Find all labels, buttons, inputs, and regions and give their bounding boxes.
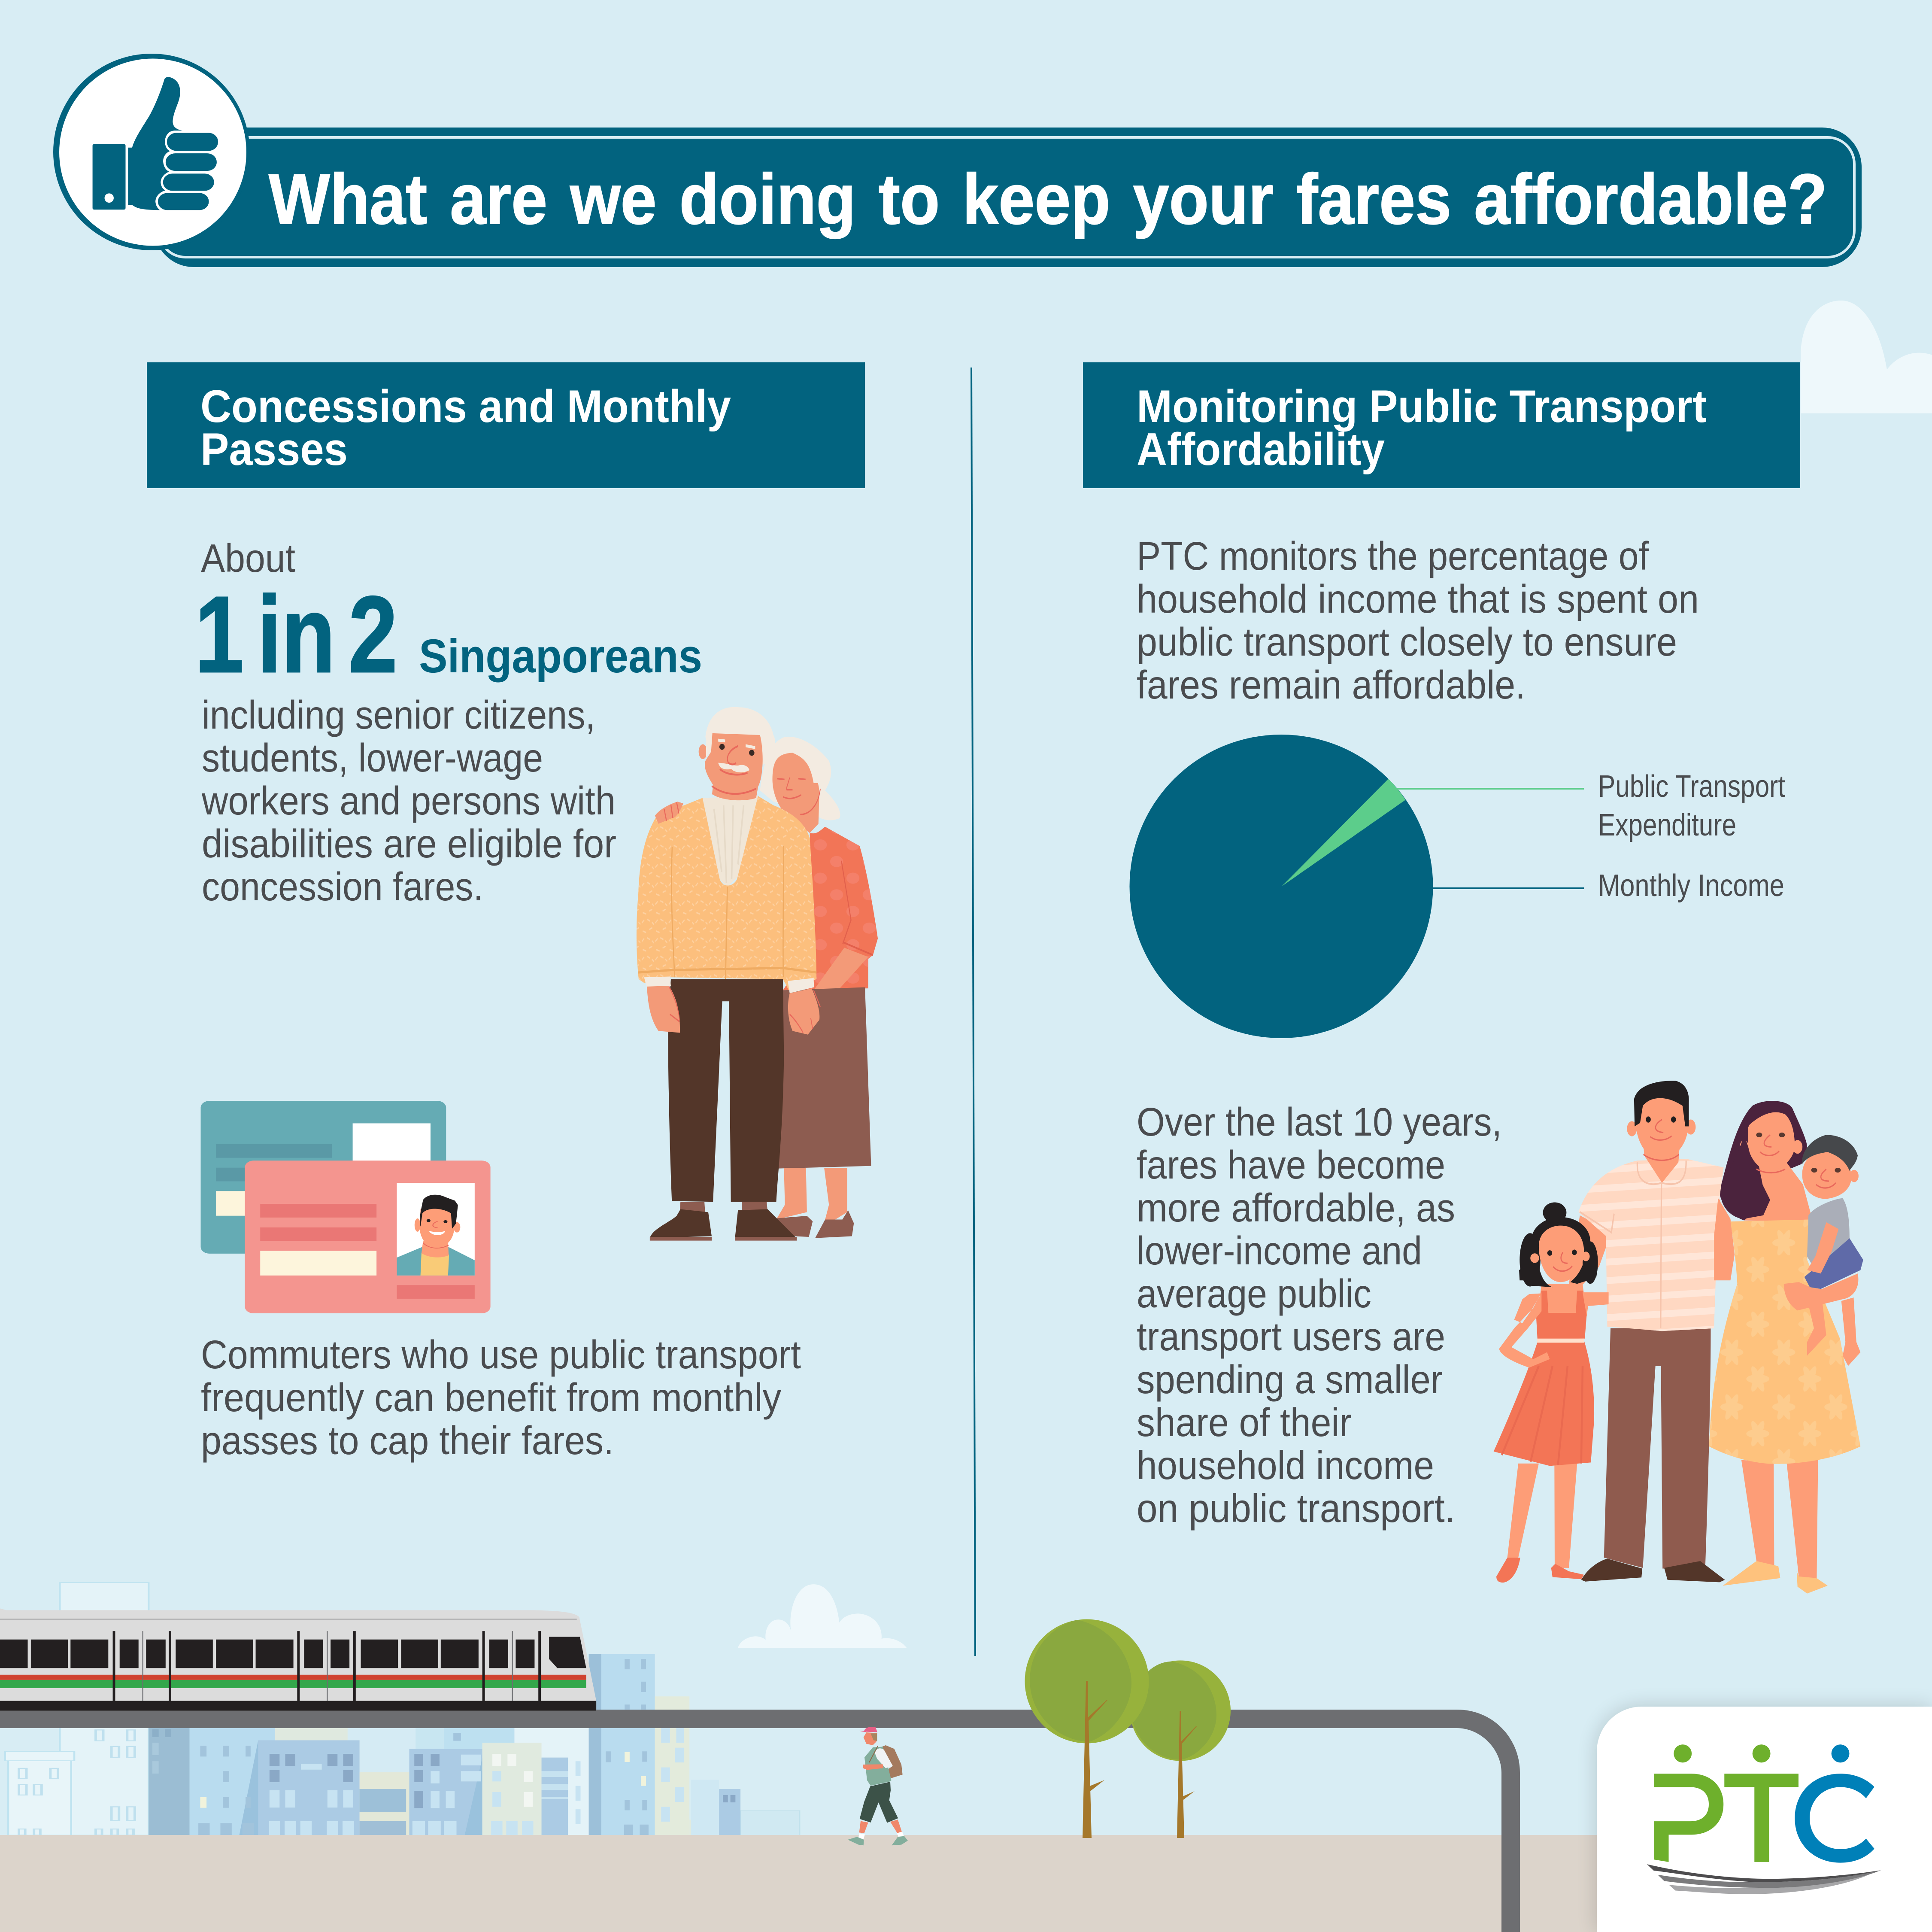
text: fares more affordable: more affordable, as — [1137, 1185, 1455, 1230]
illustration: family — [1494, 1081, 1863, 1594]
text: concession eligibility: concession fares. — [202, 864, 483, 909]
text: PTC monitoring: household income that is spent on — [1137, 577, 1699, 621]
girl — [1494, 1202, 1609, 1583]
father — [1569, 1081, 1733, 1582]
title banner — [154, 128, 1862, 267]
ground — [0, 1835, 1932, 1932]
train windows — [0, 1637, 586, 1668]
legend: income: Monthly Income — [1598, 869, 1784, 903]
big stat: 1 in 2: 1 in 2 — [195, 574, 397, 695]
text: PTC monitoring — [1137, 534, 1699, 707]
panel heading: monitoring — [1083, 362, 1800, 488]
text: fares more affordable: spending a smaller — [1137, 1357, 1443, 1402]
text: concession eligibility: workers and persons with — [201, 778, 616, 823]
legend: expenditure: Public Transport — [1598, 769, 1785, 804]
undercarriage — [0, 1701, 596, 1711]
text: concession eligibility — [201, 693, 616, 909]
text: concession eligibility: disabilities are eligible for — [202, 821, 616, 866]
text: fares more affordable: transport users are — [1137, 1314, 1445, 1359]
woman — [760, 737, 878, 1238]
text: PTC monitoring: PTC monitors the percentage of — [1137, 534, 1649, 578]
stat label: Singaporeans — [419, 630, 702, 683]
pie: public transport expenditure — [1282, 779, 1405, 886]
illustration: elderly couple — [637, 707, 878, 1241]
text: monthly passes: Commuters who use public transport — [201, 1332, 801, 1377]
train — [0, 1608, 596, 1711]
teal card — [201, 1101, 446, 1254]
text: monthly passes — [201, 1332, 801, 1463]
logo panel — [1597, 1707, 1932, 1932]
cloud: near train — [738, 1584, 907, 1648]
text: fares more affordable — [1137, 1100, 1502, 1531]
tree: large — [1025, 1619, 1149, 1838]
text: monthly passes: passes to cap their fares. — [201, 1418, 614, 1463]
text: PTC monitoring: fares remain affordable. — [1137, 662, 1526, 707]
elevated track viaduct — [0, 1710, 1520, 1932]
text: about: About — [201, 536, 295, 580]
icon: concession cards — [201, 1101, 491, 1313]
cloud: top right — [1801, 301, 1932, 413]
train body — [0, 1608, 596, 1711]
text: fares more affordable: share of their — [1137, 1400, 1352, 1445]
logo: PTC — [1647, 1744, 1881, 1894]
cityscape — [5, 1583, 800, 1835]
panel heading: monitoring: Affordability — [1137, 423, 1385, 475]
woman's hair back — [1720, 1101, 1807, 1221]
train doors — [113, 1631, 541, 1701]
mother — [1709, 1103, 1860, 1594]
panel heading: monitoring: Monitoring Public Transport — [1137, 380, 1707, 432]
walker — [848, 1727, 908, 1845]
logo panel shadow — [1597, 1707, 1932, 1932]
mid buildings — [5, 1654, 740, 1835]
text: concession eligibility: including senior citizens, — [202, 693, 595, 737]
legend: expenditure: Expenditure — [1598, 808, 1736, 842]
text: concession eligibility: students, lower-wage — [202, 735, 543, 780]
banner bar — [154, 128, 1862, 267]
banner inner outline — [159, 137, 1854, 257]
legend: expenditure — [1598, 769, 1785, 842]
text: fares more affordable: lower-income and — [1137, 1228, 1422, 1273]
text: fares more affordable: average public — [1137, 1271, 1371, 1316]
pink card — [245, 1160, 491, 1313]
pie chart — [1130, 735, 1785, 1038]
icon: thumbs up badge — [53, 54, 250, 250]
text: PTC monitoring: public transport closely to ensure — [1137, 620, 1677, 664]
text: fares more affordable: Over the last 10 years, — [1137, 1100, 1502, 1144]
panel heading: concessions: Passes — [200, 423, 348, 475]
panel heading: concessions — [147, 362, 865, 488]
title: What are we doing to keep your fares affordable? — [269, 160, 1827, 239]
pie: monthly income — [1130, 735, 1433, 1038]
building windows — [19, 1730, 135, 1835]
divider — [971, 368, 975, 1656]
text: monthly passes: frequently can benefit from monthly — [201, 1375, 781, 1420]
distant buildings — [60, 1583, 800, 1835]
text: fares more affordable: on public transport. — [1137, 1486, 1455, 1531]
panel heading: concessions: Concessions and Monthly — [200, 380, 731, 432]
text: fares more affordable: fares have become — [1137, 1142, 1445, 1187]
text: fares more affordable: household income — [1137, 1443, 1434, 1488]
child — [1784, 1135, 1863, 1366]
livery stripes — [0, 1675, 586, 1688]
tree: small — [1130, 1661, 1231, 1838]
man — [637, 707, 820, 1241]
leader line: income — [1433, 887, 1584, 889]
leader line: expenditure — [1397, 788, 1584, 790]
